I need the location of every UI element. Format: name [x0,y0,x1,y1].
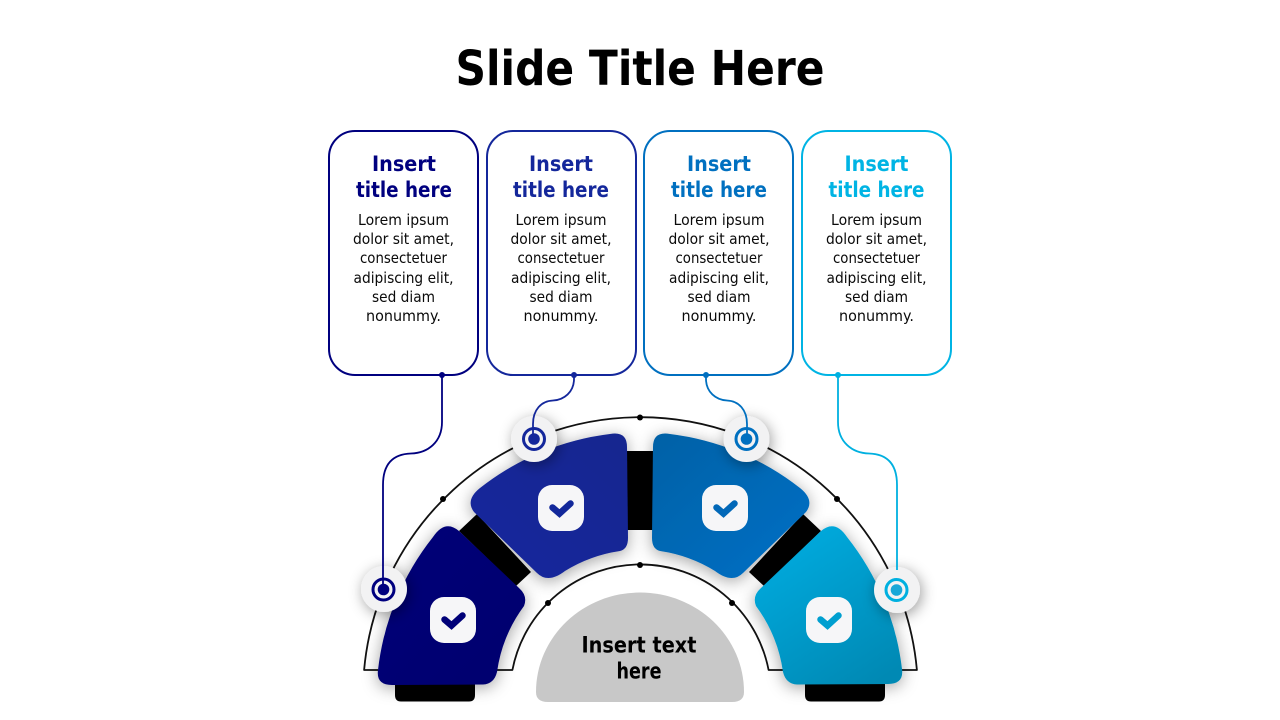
marker 2 [511,416,557,462]
card 4 heading: title here [828,178,924,202]
card 2 body: dolor sit amet, [510,230,612,248]
panel: card 4 [802,131,951,375]
card 3 heading: title here [671,178,767,202]
card 1 body: dolor sit amet, [353,230,454,248]
card 4 body: dolor sit amet, [826,230,927,248]
icon: check 3 [702,485,748,531]
center semicircle with label [536,592,744,702]
connector 2 [533,372,577,439]
card 1 heading: title here [356,178,452,202]
card 1 body: adipiscing elit, [354,269,454,287]
icon: check 1 [430,597,476,643]
card 1 body: sed diam [372,288,435,306]
card 3 heading: Insert [687,152,751,176]
marker 3 [724,416,770,462]
card 1 heading: Insert [372,152,436,176]
icon: check 4 [806,597,852,643]
card 2 body: nonummy. [524,307,598,325]
card 3 body: dolor sit amet, [668,230,770,248]
panel: card 1 [329,131,478,375]
inner arc with dots [497,562,784,670]
card 1 body: Lorem ipsum [358,211,449,229]
center label: Insert text [582,634,697,658]
card 4 body: consectetuer [833,249,921,267]
card 2 body: sed diam [530,288,592,306]
center label: here [616,660,662,684]
segment 1 [378,526,525,685]
connector 3 [703,372,747,439]
card 4 body: nonummy. [839,307,914,325]
card 2 heading: title here [513,178,609,202]
segment 2 [471,434,628,578]
card 2 body: Lorem ipsum [516,211,606,229]
black connector tabs [395,451,885,702]
card 1 body: consectetuer [360,249,448,267]
card 3 body: nonummy. [682,307,756,325]
card 4 body: sed diam [845,288,908,306]
card 2 body: consectetuer [518,249,605,267]
card 3 body: sed diam [688,288,750,306]
connector 4 [835,372,897,570]
card 4 heading: Insert [844,152,908,176]
card 3 body: Lorem ipsum [674,211,764,229]
segment 4 [755,526,902,684]
panel: card 2 [487,131,636,375]
card 3 body: consectetuer [676,249,763,267]
icon: check 2 [538,485,584,531]
panel: card 3 [644,131,793,375]
card 4 body: adipiscing elit, [826,269,926,287]
marker 1 [361,566,407,612]
card 4 body: Lorem ipsum [831,211,922,229]
outer arc with dots [364,414,917,670]
card 2 heading: Insert [529,152,593,176]
card 2 body: adipiscing elit, [511,269,611,287]
marker 4 [874,567,920,613]
card 1 body: nonummy. [366,307,441,325]
segment 3 [652,434,809,578]
connector 1 [383,372,445,589]
title: Slide Title Here [456,41,824,97]
card 3 body: adipiscing elit, [669,269,769,287]
